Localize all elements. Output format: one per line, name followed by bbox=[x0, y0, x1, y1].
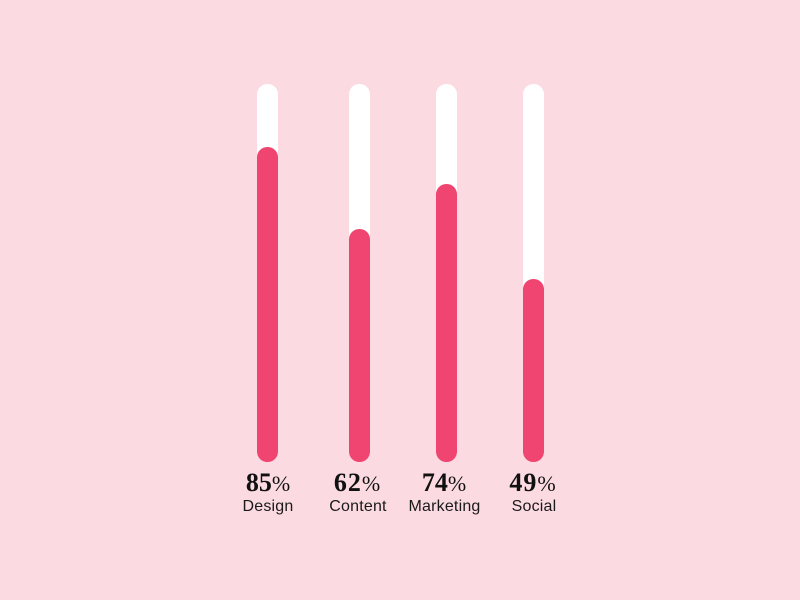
fill: Content bbox=[349, 229, 370, 462]
value: 62%: 62% bbox=[334, 468, 381, 497]
fill: Social bbox=[523, 279, 544, 462]
track: Design bbox=[257, 84, 278, 462]
track: Content bbox=[349, 84, 370, 462]
value: 49%: 49% bbox=[509, 468, 557, 497]
fill: Marketing bbox=[436, 184, 456, 462]
label: Design: Design bbox=[242, 498, 294, 515]
label: Marketing: Marketing bbox=[408, 498, 481, 515]
track: Social bbox=[523, 84, 544, 462]
value: 85%: 85% bbox=[246, 468, 290, 497]
value: 74%: 74% bbox=[422, 468, 466, 497]
track: Marketing bbox=[436, 84, 456, 462]
label: Content: Content bbox=[329, 498, 387, 515]
fill: Design bbox=[257, 147, 278, 462]
label: Social: Social bbox=[512, 498, 556, 515]
